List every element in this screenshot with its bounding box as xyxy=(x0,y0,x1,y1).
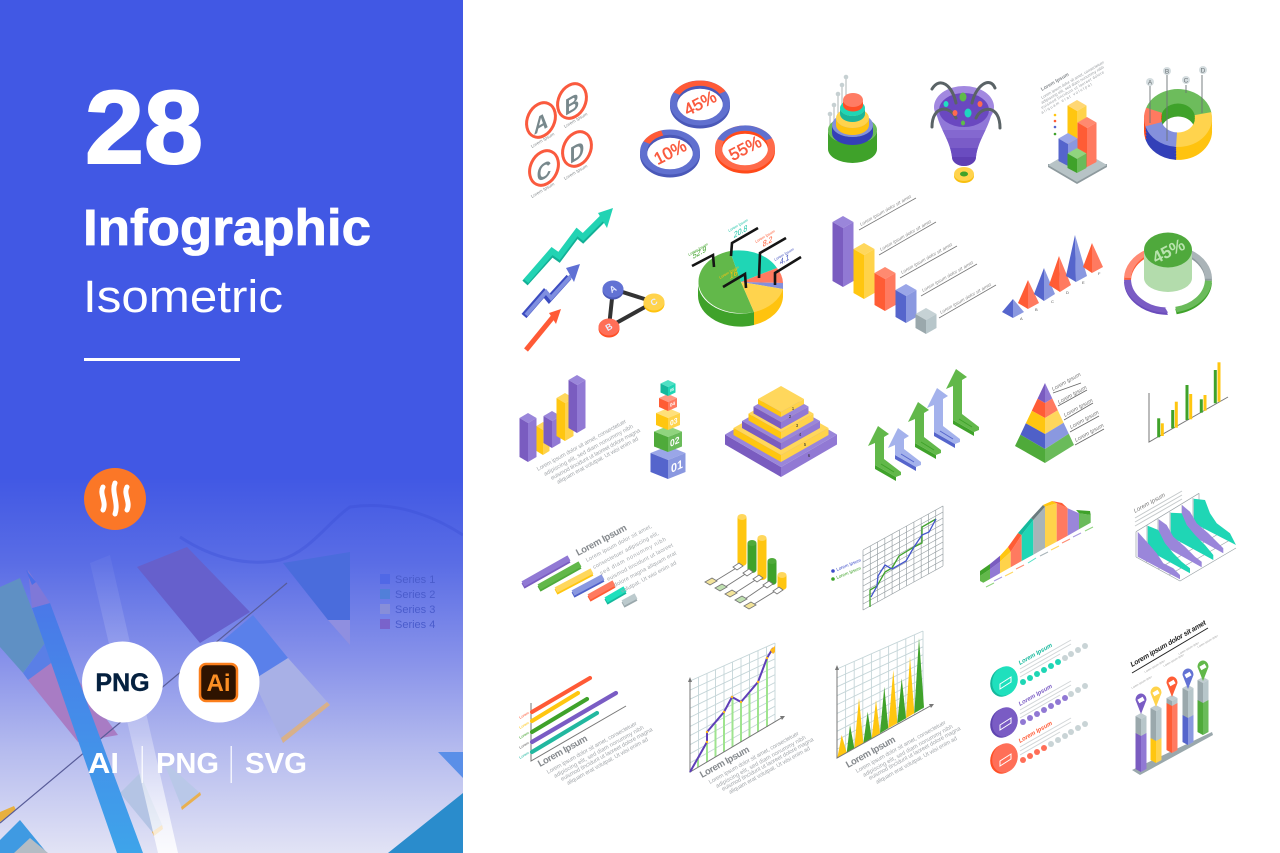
chart: ridge area chart: Lorem Ipsum xyxy=(1133,493,1167,515)
chart: purple and yellow bars with text xyxy=(520,375,642,486)
chart: stepped pyramid: 4 xyxy=(799,432,802,437)
icon: ABCD circles xyxy=(521,79,597,199)
chart: grid chart with purple rising line: Lorem Ipsum xyxy=(698,744,752,781)
chart: isometric flat bars with text: dolore magna aliquam erat xyxy=(613,550,678,589)
icon: ABCD circles: D xyxy=(570,135,584,169)
panel: blue cover sidebar: Series 1 xyxy=(395,574,435,586)
chart: grid chart with spikes: Lorem ipsum dolor sit amet, consectetuer xyxy=(855,720,947,775)
icon: ABCD circles: Lorem Ipsum xyxy=(563,163,588,181)
icon: PNG badge xyxy=(82,642,163,722)
chart: grid chart with purple rising line: Lorem ipsum dolor sit amet, consectetuer xyxy=(708,731,800,786)
donut: 55% ring: 55% xyxy=(726,132,765,165)
chart: isometric flat bars with text: volutpat. Ut wisi enim ad xyxy=(620,560,678,595)
divider rule xyxy=(84,358,240,361)
chart: colored line rows with axis: adipiscing elit, sed diam nonummy nibh xyxy=(553,725,645,780)
diagram: ABC triangle network: C xyxy=(649,296,660,308)
chart: columns with map pins: Lorem Ipsum dolor xyxy=(1178,641,1200,656)
chart: descending bars with notes: Lorem ipsum dolor sit amet xyxy=(900,242,954,275)
chart: 3D bars on platform: Lorem Ipsum xyxy=(1040,72,1071,93)
chart: isometric flat bars with text: Lorem ipsum dolor sit amet, xyxy=(585,524,654,564)
chart: 3D bars on platform: Lorem ipsum dolor sit amet, consectetuer xyxy=(1040,59,1105,100)
chart: pyramid spikes row: A xyxy=(1020,316,1023,321)
chart: grid chart with purple rising line: aliquam erat volutpat. Ut wisi enim ad xyxy=(728,746,811,796)
chart: stepped pyramid: 6 xyxy=(808,453,811,458)
chart: isometric flat bars with text: euismod tincidunt ut laoreet xyxy=(606,543,675,583)
format list: AI PNG SVG: PNG xyxy=(156,748,219,780)
icon: Illustrator badge xyxy=(178,642,260,722)
arrows: rising zigzag trio xyxy=(524,208,613,350)
heading: 28: 28 xyxy=(85,70,203,186)
panel: icon grid xyxy=(518,59,1236,796)
chart: pie with callouts xyxy=(688,218,801,327)
icon: ABCD circles: A xyxy=(534,106,549,140)
chart: 3D bars on platform xyxy=(1040,59,1107,184)
chart: columns with map pins xyxy=(1130,619,1219,775)
chart: pie with callouts: Lorem Ipsum xyxy=(718,265,740,280)
chart: descending bars with notes: Lorem ipsum dolor sit amet xyxy=(921,260,975,293)
icon: orange brand logo xyxy=(84,468,146,530)
chart: numbered cube stack: 02 xyxy=(670,435,679,450)
donut: 10% ring xyxy=(634,125,706,179)
chart: columns with map pins: Lorem ipsum dolor sit amet xyxy=(1130,619,1208,669)
subheading: Isometric: Isometric xyxy=(83,271,283,322)
chart: 3D bars on platform: euismod tincidunt ut laoreet dolore xyxy=(1040,69,1106,110)
chart: 3D bars on platform: aliquam erat volutpat xyxy=(1040,81,1093,115)
chart: pie with callouts: Lorem Ipsum xyxy=(728,218,749,233)
chart: stacked cylinder tower xyxy=(828,75,877,163)
chart: colored line rows with axis: Lorem xyxy=(518,751,530,760)
chart: isometric flat bars with text: consectetuer adipiscing elit, xyxy=(592,531,661,571)
chart: layered pyramid with labels: Lorem Ipsum xyxy=(1051,372,1082,393)
chart: grid chart with spikes: Lorem Ipsum xyxy=(844,734,898,771)
chart: ridge area chart xyxy=(1133,491,1236,581)
icon: purple funnel xyxy=(930,83,1000,183)
panel: blue cover sidebar: Series 3 xyxy=(395,604,435,616)
chart: green and yellow column pairs xyxy=(1149,362,1228,442)
chart: columns with map pins: Lorem Ipsum dolor xyxy=(1196,634,1219,649)
format list: AI PNG SVG: AI xyxy=(88,748,119,780)
chart: isometric flat bars with text xyxy=(523,523,678,605)
format list: AI PNG SVG: SVG xyxy=(245,748,307,780)
chart: numbered cube stack: 04 xyxy=(670,401,675,409)
chart: stepped pyramid: 2 xyxy=(789,414,792,419)
chart: numbered cube stack xyxy=(650,380,686,479)
chart: pie with callouts: 8.2 xyxy=(762,234,773,249)
chart: descending bars with notes: Lorem ipsum dolor sit amet xyxy=(879,219,933,252)
chart: layered pyramid with labels xyxy=(1015,372,1105,463)
chart: layered pyramid with labels: Lorem Ipsum xyxy=(1057,385,1088,406)
icon: ABCD circles: Lorem Ipsum xyxy=(530,181,555,199)
chart: numbered cube stack: 03 xyxy=(670,415,678,428)
panel: blue cover sidebar xyxy=(0,0,463,853)
diagram: ABC triangle network: A xyxy=(608,283,619,295)
chart: colored line rows with axis: Lorem xyxy=(518,741,530,750)
icon: ABCD circles: Lorem Ipsum xyxy=(530,131,555,149)
chart: cylinders with connector tags xyxy=(705,514,786,609)
chart: pie with callouts: Lorem Ipsum xyxy=(774,247,795,262)
chart: grid chart with purple rising line: euismod tincidunt ut laoreet dolore magna xyxy=(721,737,816,793)
chart: stepped pyramid: 1 xyxy=(792,406,795,411)
chart: grid chart with spikes: adipiscing elit, sed diam nonummy nibh xyxy=(862,724,954,779)
chart: colored line rows with axis: aliquam erat volutpat. Ut wisi enim ad xyxy=(566,737,649,787)
chart: colored line rows with axis: Lorem Ipsum xyxy=(536,733,590,770)
chart: purple and yellow bars with text: adipiscing elit, sed diam nonummy nibh xyxy=(543,424,635,478)
chart: isometric flat bars with text: Lorem Ipsum xyxy=(574,523,629,559)
chart: grid line graph: Lorem Ipsum xyxy=(836,557,862,572)
chart: grid chart with purple rising line: adipiscing elit, sed diam nonummy nibh xyxy=(715,735,807,790)
chart: segmented ABCD donut: A xyxy=(1148,80,1153,86)
panel: blue cover sidebar: Series 2 xyxy=(395,589,435,601)
chart: numbered cube stack: 05 xyxy=(670,386,675,393)
diagram: ABC triangle network xyxy=(598,280,664,338)
donut: 45% ring xyxy=(664,76,736,130)
chart: pyramid spikes row: B xyxy=(1035,307,1038,312)
donut: 10% ring: 10% xyxy=(651,136,690,169)
chart: pie with callouts: 16 xyxy=(729,267,738,281)
chart: three rating rows with icons xyxy=(986,640,1088,777)
chart: grid chart with spikes xyxy=(835,631,963,786)
chart: segmented ABCD donut xyxy=(1145,66,1211,159)
chart: grid line graph: Lorem Ipsum xyxy=(836,565,862,580)
icon: Illustrator badge: Ai xyxy=(206,670,230,697)
chart: colored line rows with axis: euismod tincidunt ut laoreet dolore magna xyxy=(560,727,655,783)
arrows: L-shaped rising arrows xyxy=(868,369,979,481)
chart: segmented ABCD donut: C xyxy=(1184,78,1189,84)
chart: stepped pyramid: 5 xyxy=(804,442,807,447)
chart: descending bars with notes xyxy=(832,194,996,334)
chart: columns with map pins: Lorem Ipsum dolor xyxy=(1144,659,1166,674)
chart: colored line rows with axis: Lorem xyxy=(518,731,530,740)
chart: pyramid spikes row: C xyxy=(1051,299,1054,304)
chart: columns with map pins: Lorem Ipsum dolor xyxy=(1162,653,1185,668)
chart: pie with callouts: 4.1 xyxy=(779,252,790,267)
chart: purple and yellow bars with text: aliquam erat volutpat. Ut wisi enim ad xyxy=(556,436,640,486)
chart: segmented ABCD donut: B xyxy=(1165,68,1169,76)
chart: purple and yellow bars with text: Lorem ipsum dolor sit amet, consectetuer xyxy=(536,419,628,473)
chart: colored bell curve xyxy=(980,501,1093,587)
chart: purple and yellow bars with text: euismod tincidunt ut laoreet dolore magna xyxy=(550,428,642,482)
chart: three rating rows with icons: Lorem Ipsum xyxy=(1018,642,1054,667)
chart: stepped pyramid xyxy=(725,386,837,477)
format list: AI PNG SVG xyxy=(88,746,307,783)
icon: PNG badge: PNG xyxy=(95,669,150,697)
chart: pie with callouts: 20.8 xyxy=(732,223,748,240)
chart: grid chart with spikes: aliquam erat volutpat. Ut wisi enim ad xyxy=(875,736,958,786)
chart: numbered cube stack: 01 xyxy=(671,456,683,476)
chart: pyramid spikes row: F xyxy=(1098,271,1101,276)
donut: 45% ring: 45% xyxy=(681,87,720,120)
chart: pyramid spikes row xyxy=(1002,235,1103,321)
chart: grid chart with spikes: euismod tincidunt ut laoreet dolore magna xyxy=(868,726,963,782)
chart: layered pyramid with labels: Lorem Ipsum xyxy=(1069,410,1100,431)
diagram: ABC triangle network: B xyxy=(604,321,615,333)
chart: layered pyramid with labels: Lorem Ipsum xyxy=(1074,423,1105,444)
chart: 3D bars on platform: adipiscing elit, sed diam nonummy nibh xyxy=(1040,65,1105,105)
icon: ABCD circles: C xyxy=(537,154,551,188)
chart: pie with callouts: Lorem Ipsum xyxy=(688,242,709,257)
chart: pie with callouts: Lorem Ipsum xyxy=(754,229,776,244)
chart: segmented ABCD donut: D xyxy=(1201,68,1206,74)
panel: blue cover sidebar: Series 4 xyxy=(395,619,435,631)
donut: 55% ring xyxy=(710,122,780,174)
chart: grid line graph xyxy=(831,506,943,610)
chart: three rating rows with icons: Lorem Ipsum xyxy=(1018,683,1054,708)
chart: 45% cylinder gauge: 45% xyxy=(1149,235,1188,268)
chart: layered pyramid with labels: Lorem Ipsum xyxy=(1063,398,1094,419)
chart: pyramid spikes row: E xyxy=(1082,280,1085,285)
chart: descending bars with notes: Lorem ipsum dolor sit amet xyxy=(859,194,913,227)
chart: 45% cylinder gauge xyxy=(1112,232,1224,324)
icon: ABCD circles: Lorem Ipsum xyxy=(563,111,588,129)
heading: Infographic: Infographic xyxy=(83,199,371,256)
chart: colored line rows with axis xyxy=(518,678,655,787)
chart: colored line rows with axis: Lorem ipsum dolor sit amet, consectetuer xyxy=(546,721,638,776)
icon: ABCD circles: B xyxy=(565,87,579,121)
chart: three rating rows with icons: Lorem Ipsum xyxy=(1018,720,1054,745)
chart: colored line rows with axis: Lorem xyxy=(518,721,530,730)
chart: isometric flat bars with text: sed diam nonummy nibh xyxy=(599,537,667,577)
chart: columns with map pins: Lorem Ipsum dolor xyxy=(1130,675,1153,690)
chart: colored line rows with axis: Lorem xyxy=(518,711,530,720)
chart: pie with callouts: 52.9 xyxy=(692,244,707,261)
chart: pyramid spikes row: D xyxy=(1066,290,1069,295)
chart: grid chart with purple rising line xyxy=(688,643,816,796)
chart: descending bars with notes: Lorem ipsum dolor sit amet xyxy=(939,282,993,315)
chart: stepped pyramid: 3 xyxy=(796,423,799,428)
